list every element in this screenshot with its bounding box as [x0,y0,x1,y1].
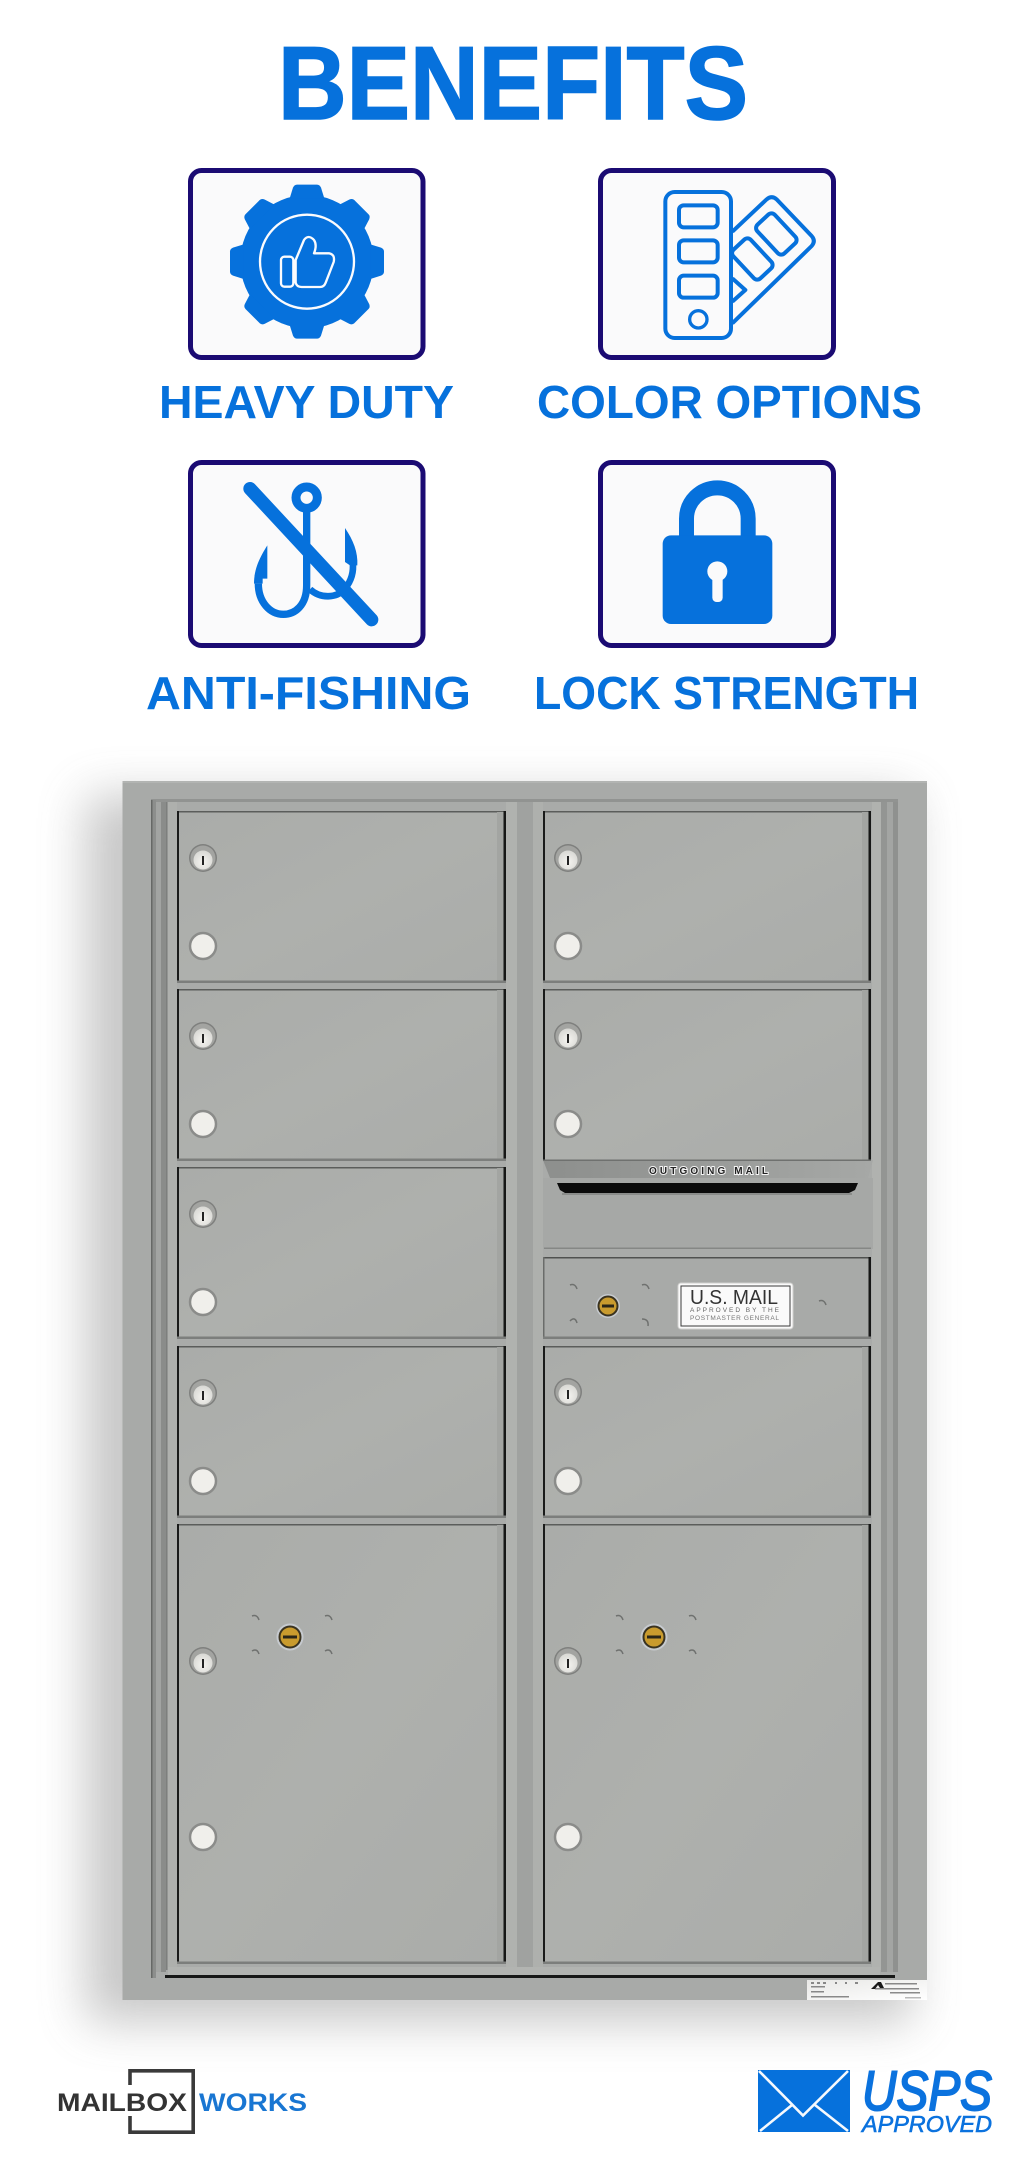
mailbox parcel door right [543,1524,871,1964]
us mail plate: APPROVED BY THE [690,1307,780,1314]
door locks [189,844,582,1675]
panel: heavy duty icon [190,170,423,358]
serial sticker [807,1980,927,2000]
icon: envelope [758,2070,850,2132]
logo: mailbox works: MAILBOX [57,2089,187,2117]
mailbox parcel door left [177,1524,506,1964]
panel: color options icon [600,170,834,358]
label: anti-fishing: ANTI-FISHING [146,667,471,719]
us mail plate: U.S. MAIL [690,1287,778,1309]
outgoing mail slot [543,1160,873,1249]
mailbox door left 1 [177,811,506,983]
mailbox door left 4 [177,1346,506,1518]
us mail plate [678,1283,793,1329]
door buttons [190,933,581,1850]
mailbox door right 1 [543,811,871,983]
mailbox door right 3 [543,1346,871,1518]
label: lock strength: LOCK STRENGTH [534,667,919,719]
us mail plate: POSTMASTER GENERAL [690,1315,779,1322]
brass parcel locks [276,1294,668,1650]
panel: lock strength icon [600,462,834,646]
logo: usps approved [758,2059,992,2137]
mailbox small door with us mail plate [543,1257,871,1339]
icon: color swatch fan [665,192,814,338]
logo: mailbox works: WORKS [199,2089,307,2117]
icon: crossed-out fish hook [250,487,372,620]
logo: usps approved: USPS [862,2059,992,2122]
icon: padlock [663,488,772,624]
logo: usps approved: APPROVED [860,2111,992,2137]
mailbox door left 2 [177,989,506,1161]
label: color options: COLOR OPTIONS [537,376,922,428]
outgoing mail label: OUTGOING MAIL [649,1166,768,1177]
mailbox door left 3 [177,1167,506,1339]
panel: mailbox unit [122,781,927,2000]
icon: gear with thumbs up [230,185,384,339]
label: heavy duty: HEAVY DUTY [159,376,454,428]
panel: anti-fishing icon [190,462,423,646]
logo: mailbox works [57,2071,307,2132]
title: BENEFITS [278,26,748,142]
mailbox shadow [86,796,912,2022]
rivets [252,1284,826,1654]
mailbox door right 2 [543,989,871,1160]
